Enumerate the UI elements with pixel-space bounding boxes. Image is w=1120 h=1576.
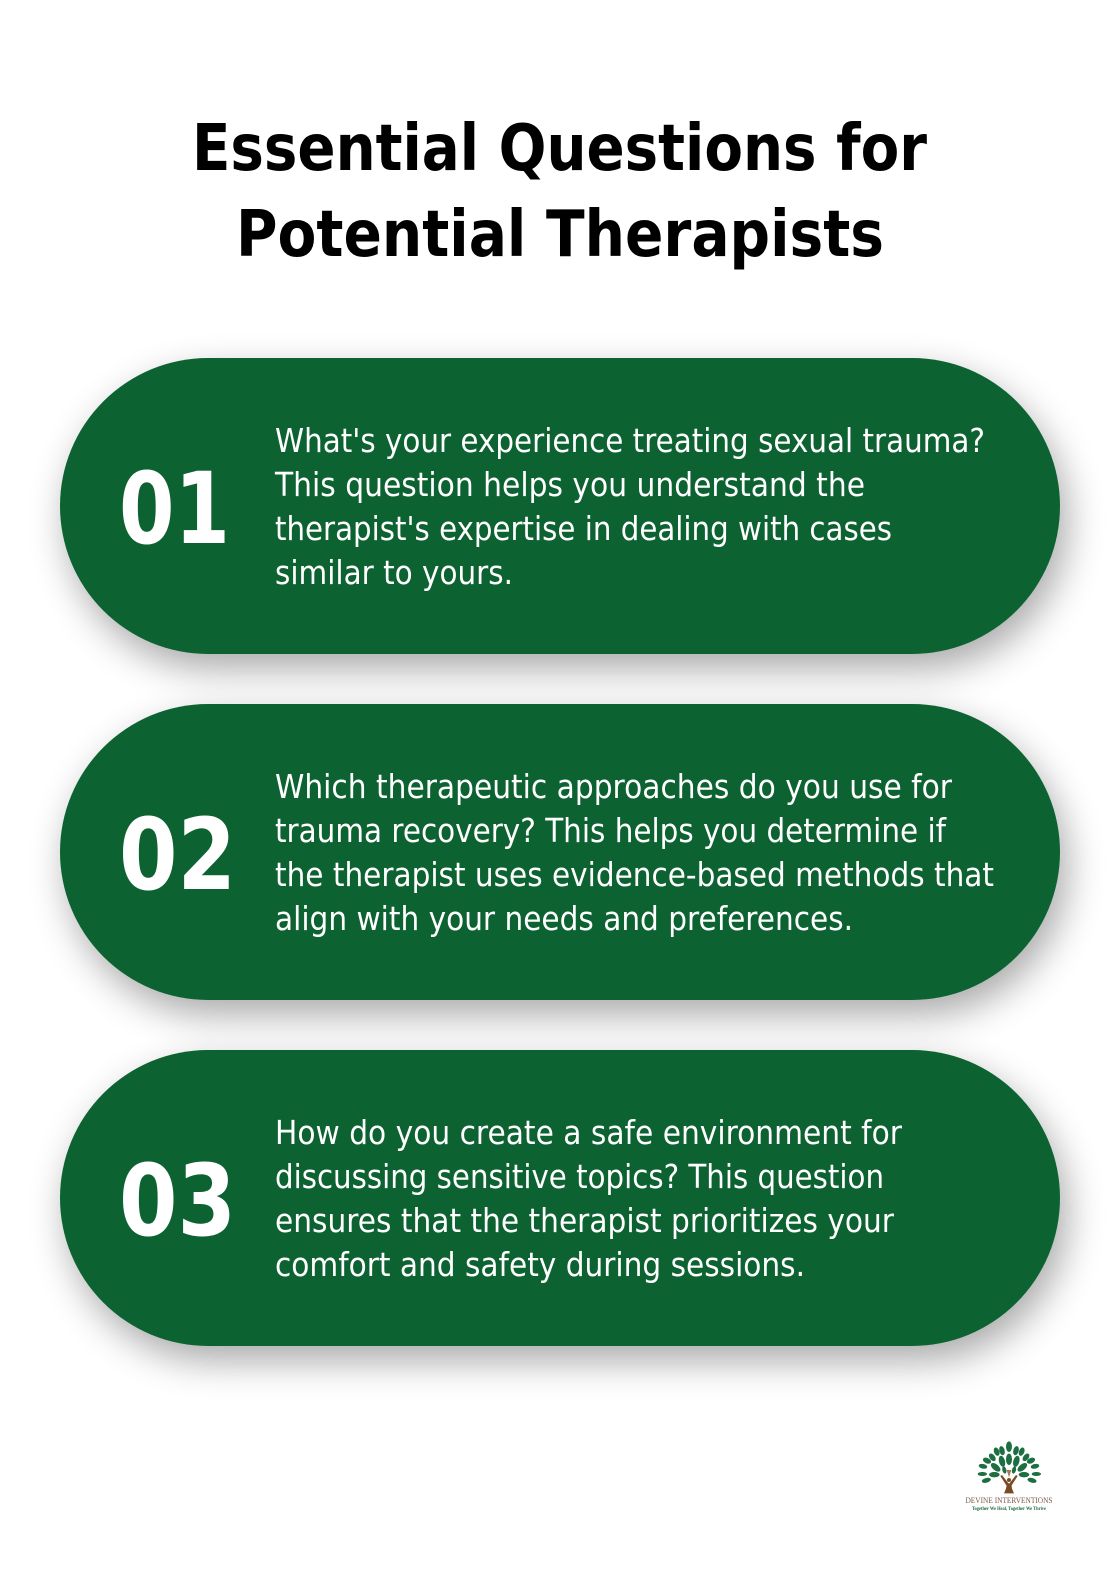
panel: question 01 <box>60 358 1060 654</box>
title: Potential Therapists <box>236 198 884 272</box>
pill background 01 <box>60 358 1060 654</box>
logo name: DEVINE INTERVENTIONS <box>966 1496 1053 1505</box>
title: Essential Questions for <box>192 112 927 186</box>
number 02: 02 <box>119 798 236 913</box>
panel: question 03 <box>60 1050 1060 1346</box>
panel: question 02 <box>60 704 1060 1000</box>
logo tagline: Together We Heal, Together We Thrive <box>972 1506 1046 1512</box>
text block 03 <box>275 1113 902 1284</box>
text block 01: therapist's expertise in dealing with cases <box>275 509 892 548</box>
text block 02: trauma recovery? This helps you determine if <box>275 811 947 850</box>
text block 01: What's your experience treating sexual trauma? <box>275 421 985 460</box>
text block 02: Which therapeutic approaches do you use for <box>275 767 952 806</box>
pill background 02 <box>60 704 1060 1000</box>
text block 02 <box>275 767 994 938</box>
text block 01: This question helps you understand the <box>274 465 865 504</box>
logo: Devine Interventions <box>966 1442 1053 1512</box>
text block 01 <box>274 421 985 592</box>
text block 03: ensures that the therapist prioritizes your <box>275 1201 894 1240</box>
title <box>192 112 927 272</box>
text block 03: discussing sensitive topics? This question <box>275 1157 884 1196</box>
text block 03: How do you create a safe environment for <box>275 1113 902 1152</box>
number 03: 03 <box>119 1144 236 1259</box>
icon: tree <box>978 1442 1041 1493</box>
text block 03: comfort and safety during sessions. <box>275 1245 805 1284</box>
number 01: 01 <box>119 452 230 567</box>
text block 02: align with your needs and preferences. <box>275 899 853 938</box>
pill background 03 <box>60 1050 1060 1346</box>
text block 02: the therapist uses evidence-based methods that <box>275 855 994 894</box>
text block 01: similar to yours. <box>275 553 513 592</box>
